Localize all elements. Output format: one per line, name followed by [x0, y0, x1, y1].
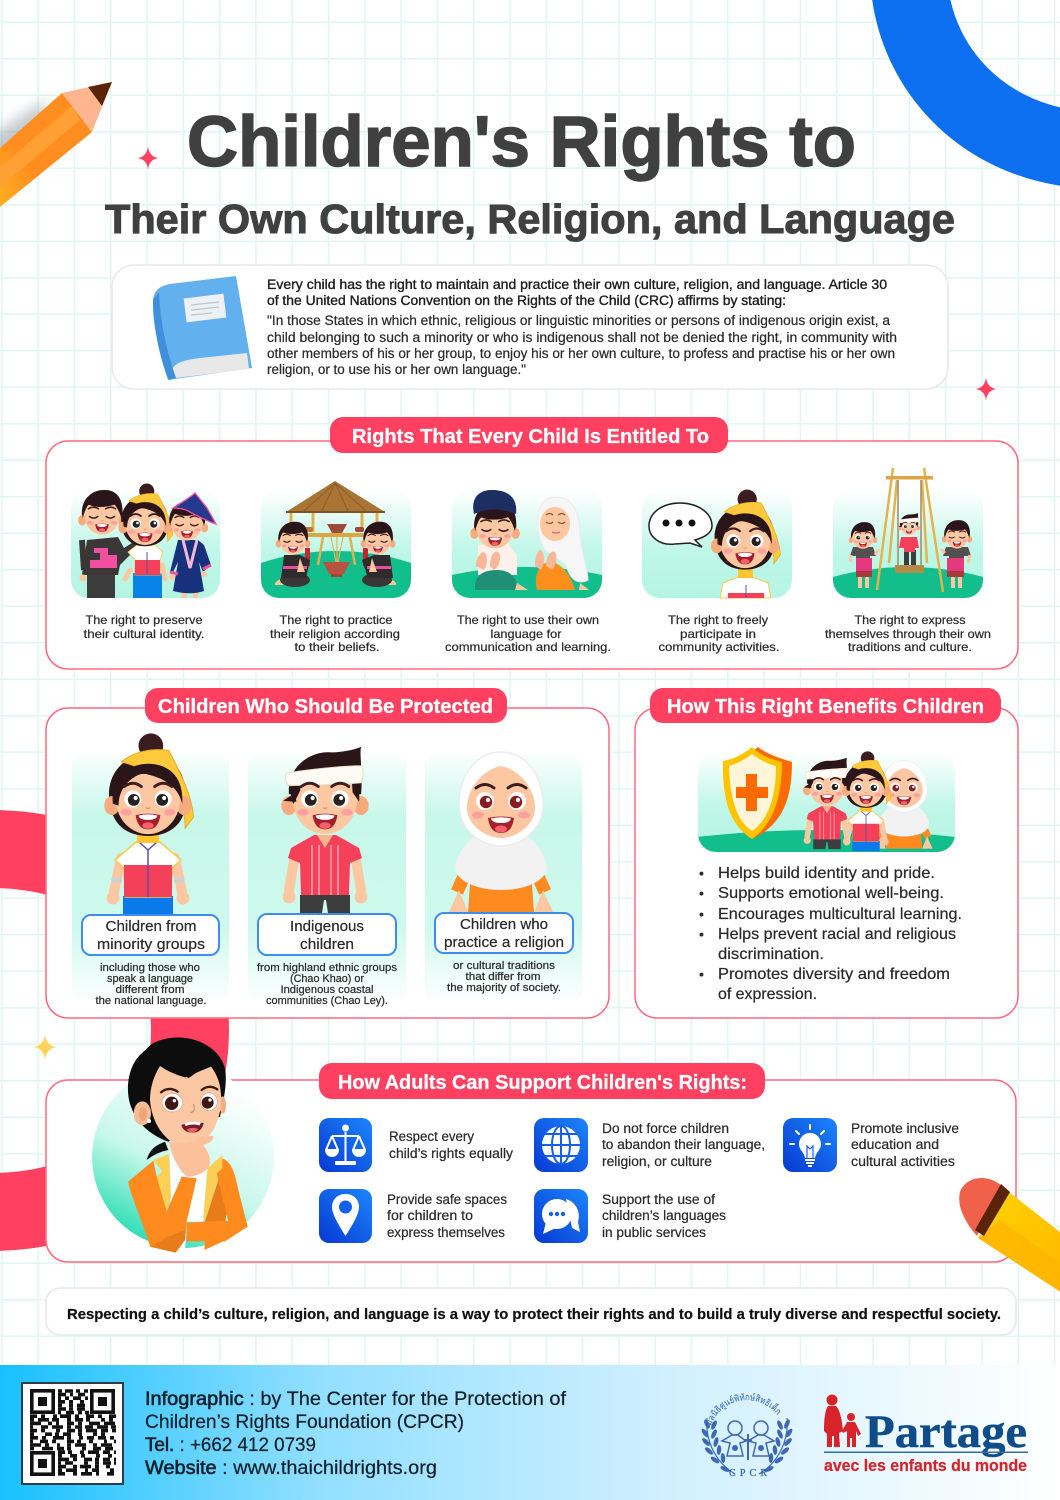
- benefits list: •: [699, 926, 704, 942]
- card: minority groups: the national language.: [96, 995, 206, 1007]
- icon: chat bubbles: [534, 1189, 588, 1243]
- caption: religion: The right to practice: [280, 613, 393, 627]
- caption: traditions: traditions and culture.: [848, 640, 972, 654]
- caption: language: The right to use their own: [457, 613, 599, 627]
- caption: traditions: [825, 613, 991, 654]
- text: do not force: Do not force children: [602, 1121, 729, 1136]
- contact details: Tel. : +662 412 0739: [145, 1435, 316, 1456]
- icon: yellow pencil: [959, 1178, 1060, 1298]
- panel: how adults can support: [46, 1063, 1016, 1262]
- text: promote: Promote inclusive: [851, 1121, 959, 1136]
- heading: protected: [145, 688, 507, 723]
- card: religion: the majority of society.: [447, 982, 561, 994]
- text: introduction: Every child has the right to maintain and practice their own culture, religion, and language. Article 30: [267, 277, 887, 292]
- card: minority groups: minority groups: [97, 936, 205, 953]
- illustration: religion: [261, 481, 411, 598]
- icon: map pin: [319, 1189, 372, 1243]
- caption: traditions: The right to express: [854, 613, 966, 627]
- icon: pink sparkle: [138, 146, 158, 170]
- text: do not force: [602, 1121, 765, 1169]
- card: minority groups: Children from: [106, 918, 196, 935]
- caption: religion: [270, 613, 400, 654]
- card: indigenous children: Indigenous: [290, 918, 364, 935]
- text: respect: Respect every: [389, 1129, 474, 1144]
- caption: religion: their religion according: [270, 627, 400, 641]
- contact details: Infographic : by The Center for the Protection of: [145, 1389, 567, 1410]
- benefits list: Encourages multicultural learning.: [718, 906, 962, 923]
- text: introduction: of the United Nations Convention on the Rights of the Child (CRC) affirms by stating:: [267, 293, 786, 308]
- card: indigenous children: [248, 747, 406, 1007]
- text: respect: [389, 1129, 513, 1161]
- caption: language: language for: [490, 627, 562, 641]
- heading: adults: How Adults Can Support Children's Rights:: [338, 1072, 747, 1094]
- benefits list: of expression.: [718, 986, 817, 1003]
- text: introduction: child belonging to such a minority or who is indigenous shall not be denied the right, in community with: [267, 330, 897, 345]
- caption: participation: community activities.: [658, 640, 780, 654]
- closing statement box: [46, 1288, 1016, 1335]
- text: languages: [602, 1192, 726, 1240]
- caption: participation: [658, 613, 780, 654]
- illustration: language: [452, 490, 602, 598]
- text: safe spaces: for children to: [387, 1208, 473, 1223]
- icon: pink sparkle: [976, 378, 996, 400]
- text: safe spaces: Provide safe spaces: [387, 1192, 507, 1207]
- text: safe spaces: express themselves: [387, 1225, 505, 1240]
- caption: cultural identity: [84, 613, 204, 641]
- decorative red ribbon: [0, 849, 190, 1212]
- benefits list: •: [699, 906, 704, 922]
- title: [105, 103, 955, 242]
- illustration: shield and children: [698, 747, 955, 852]
- text: introduction: [267, 277, 897, 377]
- panel: introduction: [112, 265, 948, 389]
- card: minority groups: different from: [116, 984, 184, 996]
- title: Their Own Culture, Religion, and Language: [105, 196, 955, 242]
- card: indigenous children: from highland ethnic groups: [257, 962, 398, 974]
- benefits list: Promotes diversity and freedom: [718, 966, 950, 983]
- caption: cultural identity: The right to preserve: [86, 613, 203, 627]
- contact details: Children’s Rights Foundation (CPCR): [145, 1412, 464, 1433]
- illustration: cultural identity: [71, 484, 220, 598]
- text: languages: children’s languages: [602, 1208, 726, 1223]
- card: religion: that differ from: [466, 971, 540, 983]
- title: Children's Rights to: [187, 103, 856, 182]
- text: safe spaces: [387, 1192, 507, 1240]
- icon: blue book: [153, 276, 252, 380]
- heading: benefits: How This Right Benefits Children: [667, 696, 984, 718]
- card: indigenous children: communities (Chao Ley).: [266, 995, 388, 1007]
- benefits list: •: [699, 885, 704, 901]
- icon: orange pencil: [0, 82, 112, 207]
- heading: benefits: [650, 688, 1001, 723]
- logo: Partage: [824, 1394, 1028, 1475]
- logo: Partage: Partage: [865, 1406, 1027, 1458]
- text: promote: education and: [851, 1137, 939, 1152]
- benefits list: discrimination.: [718, 946, 824, 963]
- card: minority groups: including those who: [100, 962, 200, 974]
- benefits list: Supports emotional well-being.: [718, 885, 944, 902]
- text: respect: child’s rights equally: [389, 1146, 513, 1161]
- heading: rights: [330, 417, 728, 453]
- card: indigenous children: Indigenous coastal: [280, 984, 374, 996]
- card: indigenous children: (Chao Khao) or: [290, 973, 364, 985]
- card: religion: or cultural traditions: [453, 960, 556, 972]
- caption: cultural identity: their cultural identity.: [84, 627, 204, 641]
- text: languages: in public services: [602, 1225, 706, 1240]
- icon: light bulb: [783, 1118, 837, 1172]
- caption: traditions: themselves through their own: [825, 627, 991, 641]
- decorative blue arc: [910, 0, 1060, 148]
- benefits list: Helps prevent racial and religious: [718, 926, 956, 943]
- text: languages: Support the use of: [602, 1192, 715, 1207]
- card: minority groups: speak a language: [107, 973, 193, 985]
- illustration: participation: [642, 490, 792, 598]
- closing statement box: Respecting a child’s culture, religion, and language is a way to protect their rights and to build a truly diverse and respectful society.: [67, 1306, 1001, 1323]
- logo: CPCR: มูลนิธิศูนย์พิทักษ์สิทธิเด็ก: [706, 1393, 780, 1426]
- heading: adults: [319, 1063, 765, 1099]
- panel: benefits: [634, 688, 1019, 1019]
- benefits list: [699, 865, 962, 1003]
- icon: globe: [534, 1118, 588, 1172]
- benefits list: •: [699, 865, 704, 881]
- text: introduction: other members of his or her group, to enjoy his or her own culture, to profess and practise his or her own: [267, 346, 895, 361]
- illustration: traditions: [833, 468, 983, 598]
- caption: language: [445, 613, 611, 654]
- caption: religion: to their beliefs.: [294, 640, 380, 654]
- logo: CPCR: CPCR: [729, 1468, 767, 1479]
- panel: children who should be protected: [46, 688, 609, 1018]
- logo: CPCR: [702, 1393, 792, 1479]
- benefits list: •: [699, 966, 704, 982]
- card: religion: [425, 752, 582, 1000]
- caption: participation: The right to freely: [668, 613, 768, 627]
- contact details: [145, 1389, 567, 1479]
- text: promote: cultural activities: [851, 1154, 955, 1169]
- card: religion: Children who: [460, 916, 548, 933]
- text: introduction: "In those States in which ethnic, religious or linguistic minorities or persons of indigenous origin exist, a: [267, 313, 890, 328]
- text: do not force: to abandon their language,: [602, 1137, 765, 1152]
- contact details: Website : www.thaichildrights.org: [145, 1458, 437, 1479]
- text: do not force: religion, or culture: [602, 1154, 712, 1169]
- panel: rights: [45, 417, 1019, 670]
- QR code: [22, 1383, 123, 1484]
- icon: scales: [319, 1118, 372, 1172]
- icon: yellow sparkle: [33, 1034, 57, 1060]
- illustration: thinking woman: [92, 1038, 274, 1253]
- caption: language: communication and learning.: [445, 640, 611, 654]
- text: introduction: religion, or to use his or her own language.": [267, 362, 526, 377]
- caption: participation: participate in: [680, 627, 756, 641]
- card: religion: practice a religion: [444, 934, 564, 951]
- text: promote: [851, 1121, 959, 1169]
- footer: [0, 1365, 1056, 1500]
- card: indigenous children: children: [300, 936, 354, 953]
- card: minority groups: [72, 733, 229, 1007]
- benefits list: Helps build identity and pride.: [718, 865, 935, 882]
- heading: protected: Children Who Should Be Protected: [158, 696, 493, 718]
- heading: rights: Rights That Every Child Is Entitled To: [352, 426, 709, 448]
- logo: Partage: avec les enfants du monde: [824, 1456, 1027, 1475]
